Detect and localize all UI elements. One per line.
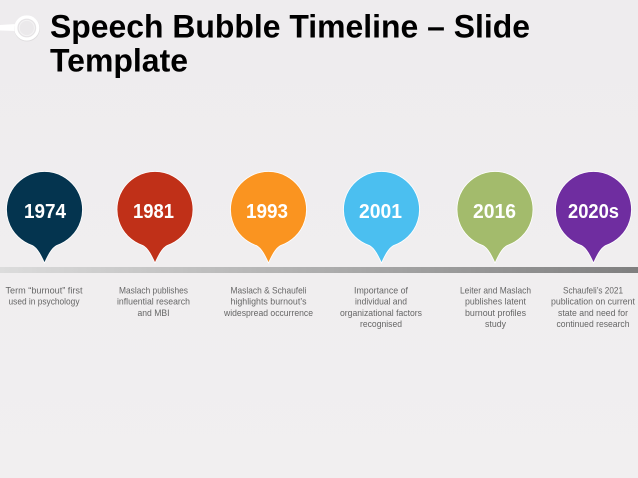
text: 2016 description: burnout profiles <box>465 308 526 319</box>
text: 1993 description: highlights burnout’s <box>230 296 307 308</box>
pin: 2001 <box>344 172 420 263</box>
pin: 2020s: 2020s <box>568 201 619 223</box>
text: 1981 description: influential research <box>117 296 190 308</box>
text: 2020s description: continued research <box>556 319 630 330</box>
text: 2020s description: state and need for <box>558 308 628 319</box>
text: 2001 description: individual and <box>355 296 407 308</box>
timeline bar <box>0 267 638 273</box>
pin: 2020s <box>556 172 632 263</box>
text: 1993 description: widespread occurrence <box>223 308 313 319</box>
text: 1974 description: used in psychology <box>8 296 80 308</box>
text: 2001 description: recognised <box>360 319 402 330</box>
pin: 1993 <box>230 172 306 263</box>
pin: 1981: 1981 <box>133 201 174 223</box>
text: 1993 description <box>223 286 313 319</box>
icon: ring connector <box>0 17 38 40</box>
text: 2001 description: organizational factors <box>340 308 422 319</box>
pin: 2001: 2001 <box>359 201 402 223</box>
text: 1993 description: Maslach & Schaufeli <box>230 286 306 296</box>
title: Speech Bubble Timeline – Slide <box>50 8 530 44</box>
text: 2020s description <box>551 286 635 330</box>
text: 1981 description <box>117 286 190 319</box>
pin: 1993: 1993 <box>246 201 288 223</box>
text: 1974 description <box>6 286 83 308</box>
text: 1974 description: Term “burnout” first <box>6 286 83 296</box>
text: 1981 description: and MBI <box>138 308 170 319</box>
pin: 2016: 2016 <box>473 201 516 223</box>
pin: 1981 <box>117 172 193 263</box>
title <box>50 8 530 78</box>
text: 2016 description: Leiter and Maslach <box>460 286 531 296</box>
title: Template <box>50 42 188 78</box>
pin: 1974 <box>7 172 83 263</box>
pin: 2016 <box>457 172 533 263</box>
text: 2016 description: study <box>485 319 506 330</box>
text: 2016 description <box>460 286 531 330</box>
pin: 1974: 1974 <box>24 201 67 223</box>
text: 2001 description: Importance of <box>354 286 408 296</box>
text: 2020s description: Schaufeli’s 2021 <box>563 286 623 296</box>
text: 2001 description <box>340 286 422 330</box>
text: 1981 description: Maslach publishes <box>119 286 188 296</box>
text: 2016 description: publishes latent <box>465 296 526 308</box>
